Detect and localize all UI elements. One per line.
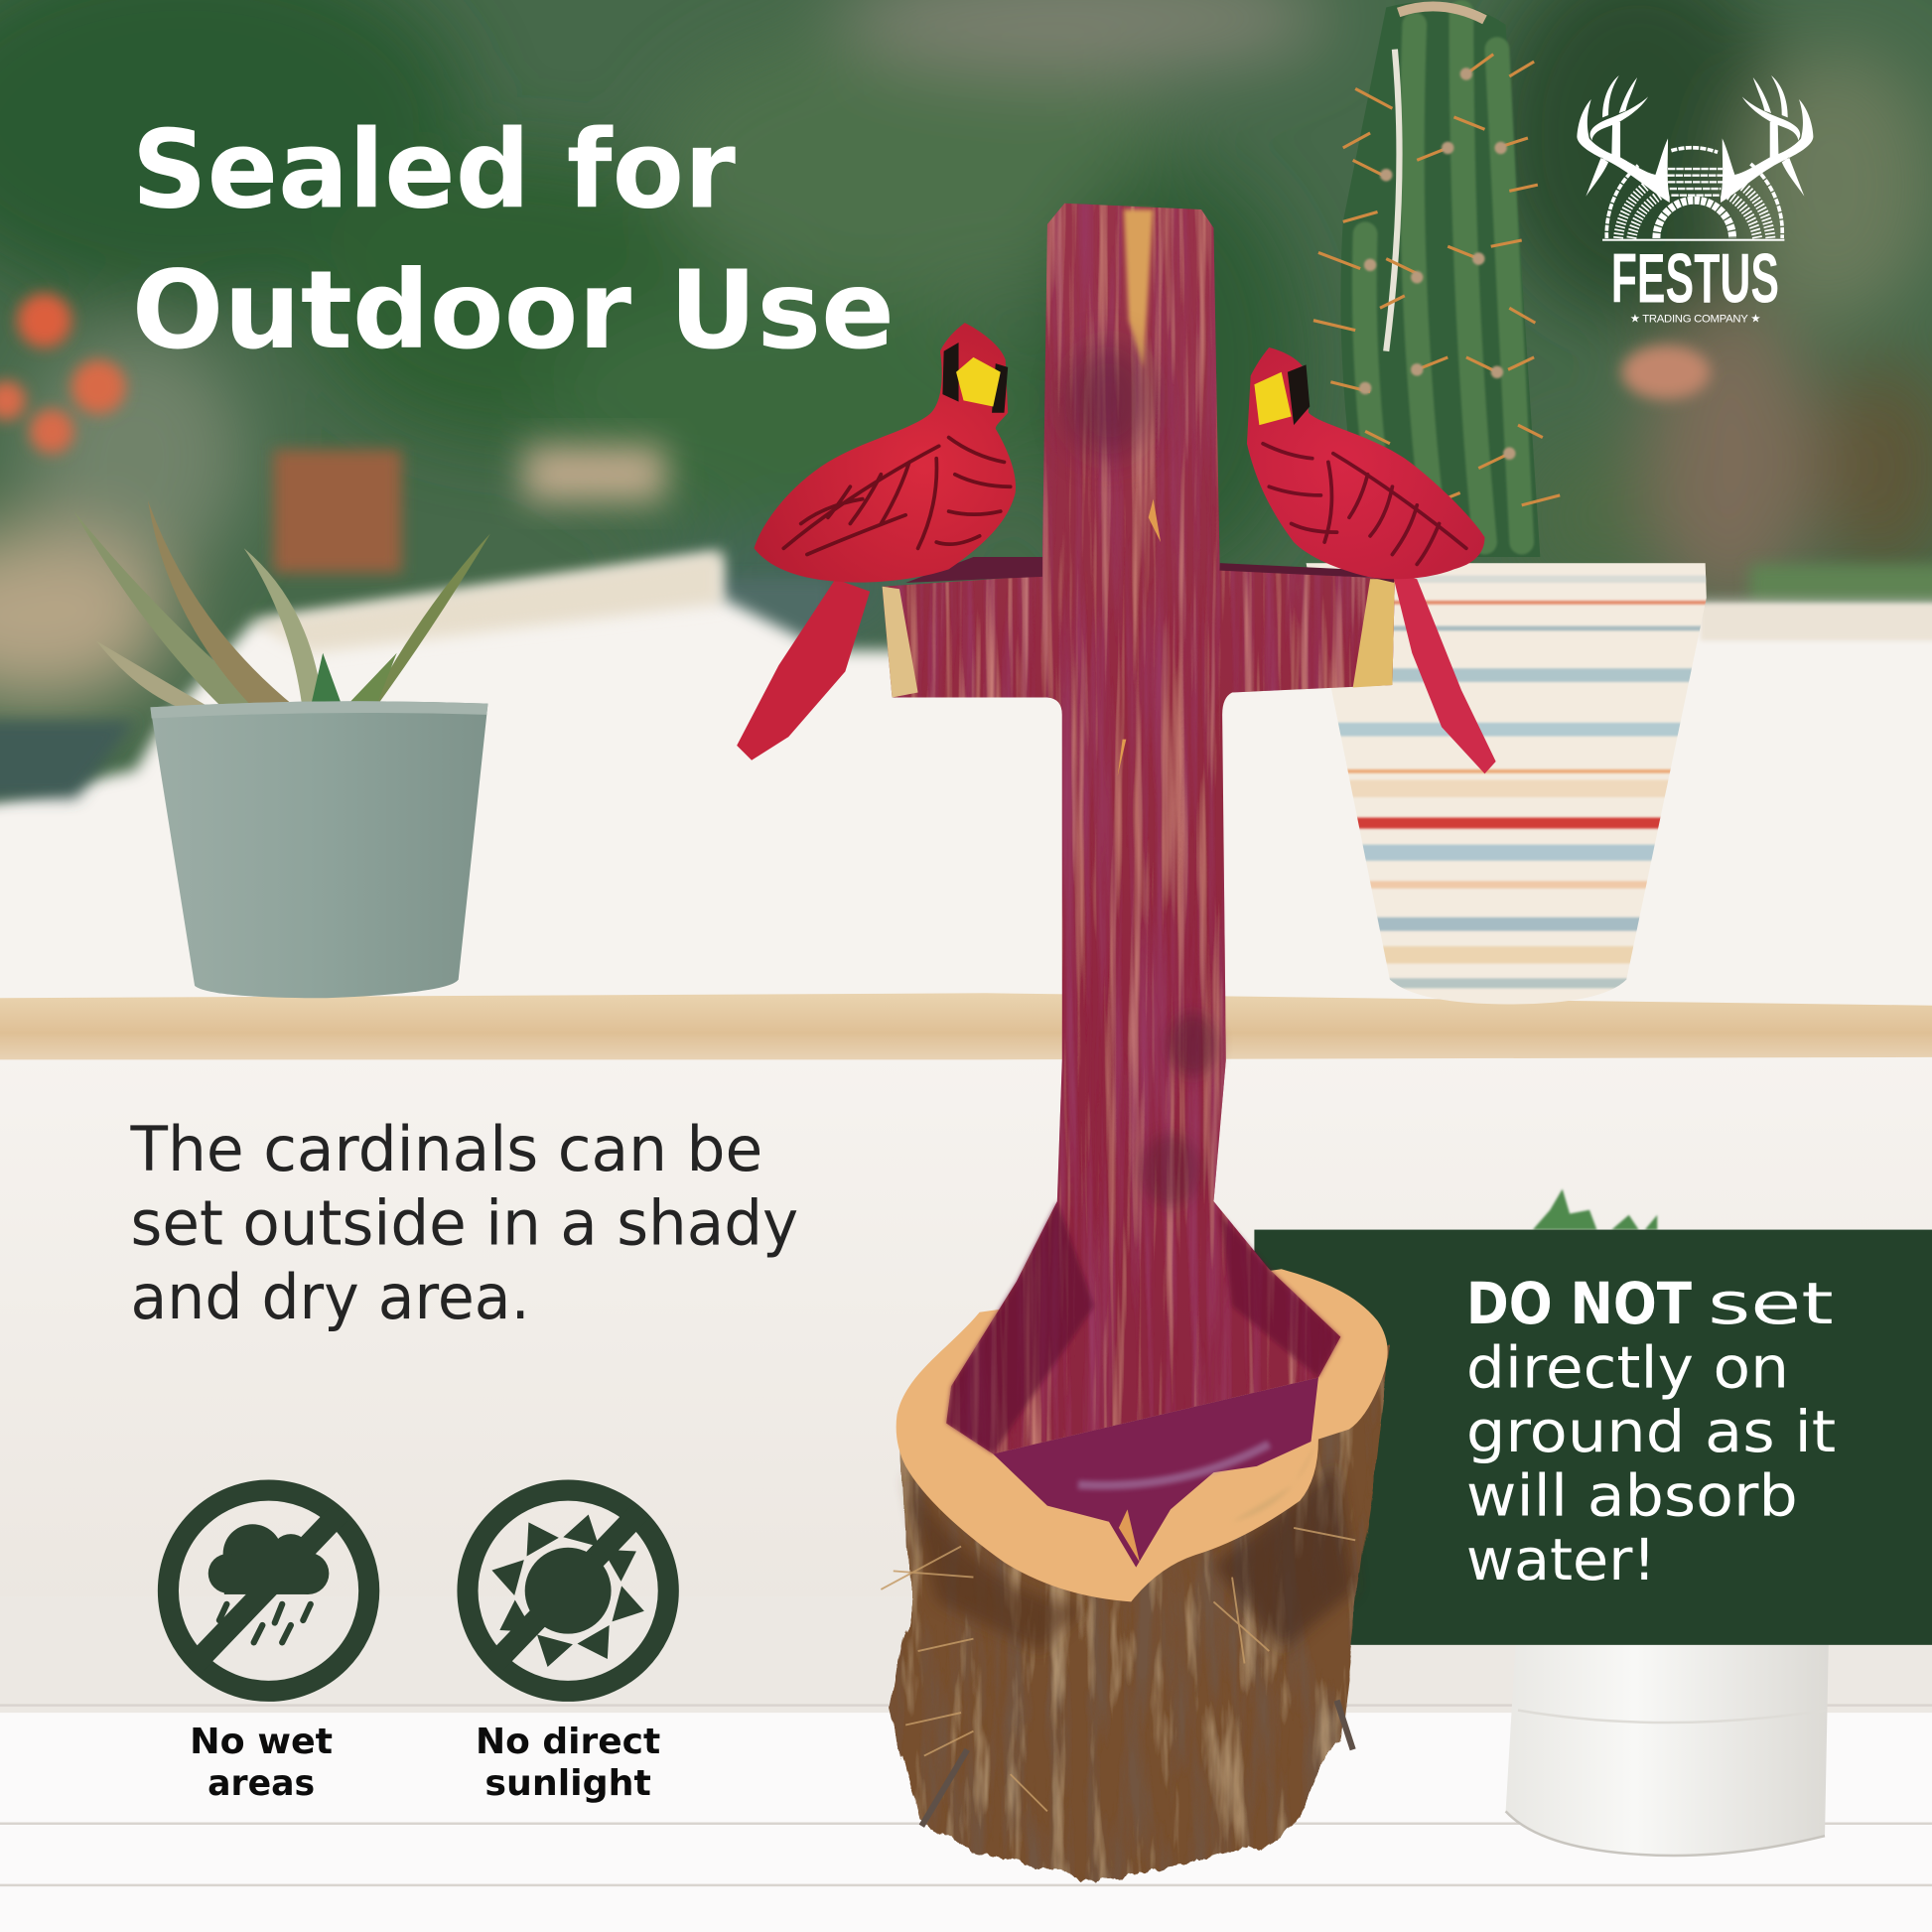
callout text: ground as it (1466, 1398, 1836, 1465)
left cardinal (737, 323, 1016, 760)
eye mask and beak (942, 343, 1008, 413)
callout panel: do not set on ground (1254, 1230, 1932, 1645)
body (755, 323, 1016, 583)
lower wall (0, 1053, 1932, 1601)
stump seat: sealed purple plate (993, 1378, 1318, 1568)
aloe plant (73, 500, 490, 707)
icon label: no wet areas: areas (207, 1763, 315, 1804)
background: blurred garden foliage (0, 0, 1932, 863)
body text: The cardinals can be (130, 1113, 762, 1185)
eye mask and beak (1288, 364, 1310, 425)
small plant above callout (1533, 1189, 1657, 1230)
white wall behind shelf (0, 552, 1932, 1047)
stump cut face (897, 1269, 1388, 1601)
logo: Festus Trading Company: ★ TRADING COMPANY ★ (1630, 314, 1760, 326)
tall cactus (1313, 2, 1560, 557)
tree stump bark (881, 1343, 1390, 1882)
body text: set outside in a shady (131, 1186, 798, 1259)
icon label: no wet areas (190, 1722, 333, 1804)
knots and sapwood streaks (883, 209, 1395, 1453)
tree ring emblem (1606, 148, 1782, 238)
callout text: will absorb (1466, 1462, 1798, 1530)
grey-green flower pot (150, 701, 487, 998)
callout text: water! (1466, 1526, 1656, 1593)
body text: and dry area. (131, 1261, 530, 1333)
callout text: set (1708, 1270, 1834, 1337)
icon label: no direct sunlight: sunlight (484, 1763, 651, 1804)
icon: no direct sunlight (468, 1490, 668, 1691)
callout text (1466, 1270, 1836, 1593)
right cardinal (1247, 347, 1496, 773)
callout text: directly on (1466, 1333, 1789, 1401)
tail (1392, 573, 1496, 773)
icon label: no wet areas: No wet (190, 1722, 333, 1762)
wordmark: FESTUS (1611, 239, 1779, 318)
antlers (1577, 75, 1813, 203)
title: Sealed for (132, 107, 736, 232)
icon: no wet areas (168, 1490, 369, 1691)
callout text: DO NOT (1466, 1270, 1692, 1337)
striped flower pot (1307, 563, 1707, 1005)
body (1247, 347, 1484, 579)
white bucket (1506, 1645, 1829, 1857)
title: Outdoor Use (132, 247, 895, 373)
logo: Festus Trading Company (1577, 75, 1813, 326)
icon label: no direct sunlight: No direct (476, 1722, 660, 1762)
title (132, 107, 895, 373)
tail (737, 579, 870, 760)
wooden cross with flared base (883, 204, 1395, 1453)
body text (130, 1113, 798, 1333)
white plank floor (0, 1596, 1932, 1932)
icon label: no direct sunlight (476, 1722, 660, 1804)
shelf ledge (0, 993, 1932, 1059)
